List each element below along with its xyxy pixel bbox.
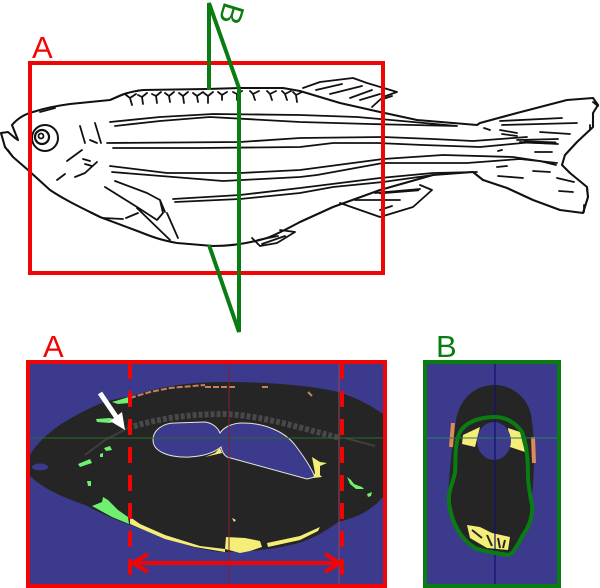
- dashed red bounds: [130, 363, 342, 586]
- swim bladder: [153, 422, 315, 479]
- panel border: [28, 362, 385, 586]
- red double arrow: [131, 554, 340, 572]
- fish line drawing: [1, 78, 598, 246]
- panel A: longitudinal scan: [28, 362, 385, 586]
- panel B: cross-section scan: [425, 362, 559, 586]
- lateral stripes: [107, 114, 557, 202]
- scan background: [425, 362, 559, 586]
- swim bladder hole: [477, 422, 511, 460]
- green section plane B: [209, 3, 239, 332]
- label B lower: B: [436, 329, 457, 364]
- eye: [32, 125, 58, 151]
- green organ outline: [449, 417, 532, 555]
- green patches: [78, 397, 372, 524]
- mouth opening: [32, 464, 48, 470]
- dorsal spines: [126, 91, 302, 105]
- crosshair lines: [425, 437, 559, 439]
- label A lower: A: [43, 329, 64, 364]
- gill marks: [5, 108, 101, 180]
- panel border: [425, 362, 559, 586]
- crosshair lines: [28, 437, 385, 439]
- dorsal fin: [303, 78, 397, 107]
- label A top: A: [32, 30, 53, 65]
- orange dorsal flecks: [130, 385, 312, 398]
- yellow deposits: [462, 427, 525, 550]
- scan background: [28, 362, 385, 586]
- body section: [30, 382, 383, 552]
- body section: [448, 385, 534, 555]
- spine: [128, 414, 340, 438]
- red selection box A on fish: [30, 63, 383, 273]
- tail fin rays: [484, 118, 577, 192]
- yellow deposits: [130, 448, 327, 553]
- fish body outline: [1, 88, 598, 246]
- pectoral fin: [103, 181, 178, 240]
- white arrow: [100, 393, 119, 421]
- orange side stripes: [451, 423, 453, 447]
- anal fin: [340, 185, 432, 217]
- ventral fin: [252, 230, 295, 246]
